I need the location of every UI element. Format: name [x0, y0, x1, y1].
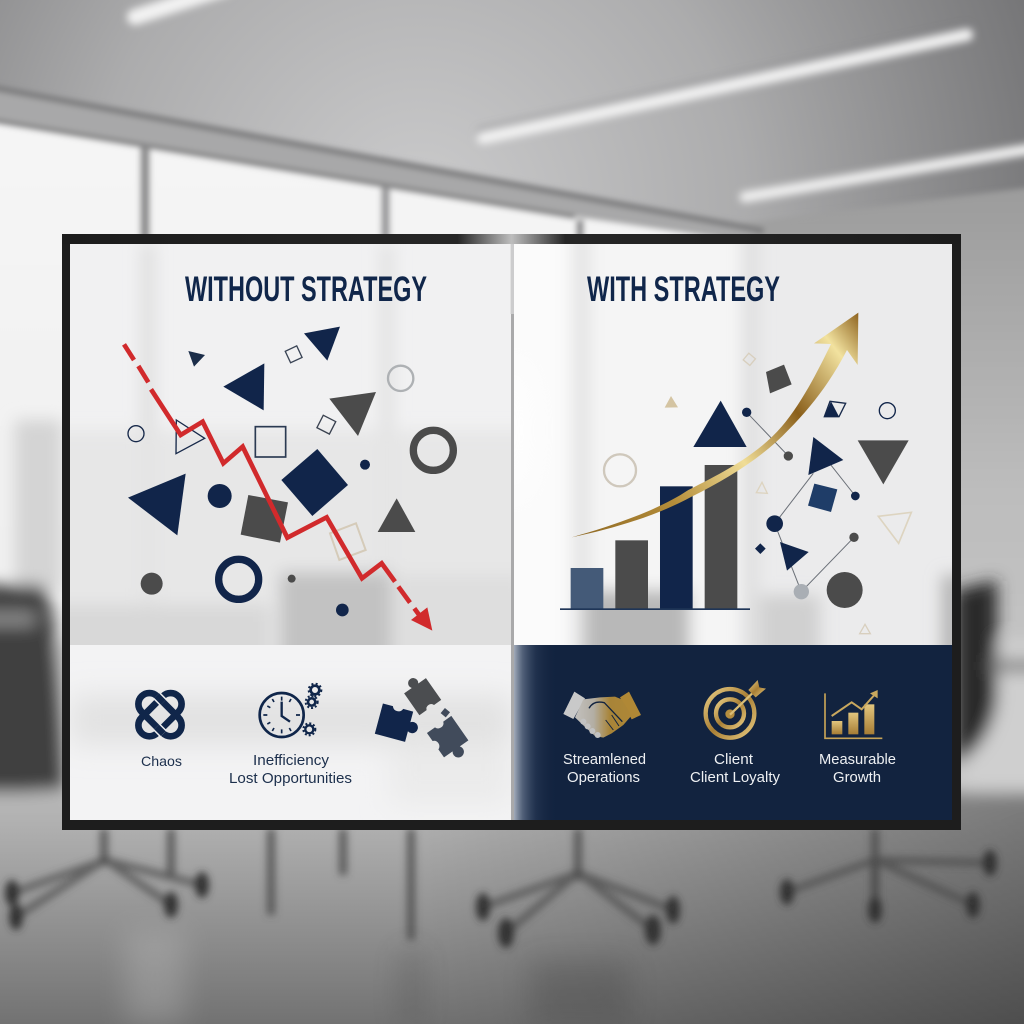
rising gold arrow	[572, 313, 858, 537]
heading: without strategy: WITHOUT STRATEGY	[185, 270, 427, 309]
heading: with strategy: WITH STRATEGY	[587, 270, 780, 309]
label: client loyalty: Client	[714, 752, 753, 768]
label: measurable growth: Measurable	[819, 752, 896, 768]
label: client loyalty: Client Loyalty	[690, 770, 781, 786]
label: streamlined operations: Streamlened	[563, 752, 646, 768]
icon: clock and gears	[260, 684, 321, 737]
chair bases and table legs	[5, 829, 997, 948]
icon: chaos knot	[134, 689, 186, 741]
scattered network shapes	[604, 353, 911, 634]
display frame	[62, 234, 961, 830]
panel divider	[510, 244, 514, 820]
scattered shapes	[128, 327, 453, 616]
falling red arrow	[124, 344, 432, 631]
panel: without strategy outcomes	[70, 645, 512, 820]
panel: without strategy	[70, 244, 511, 645]
label: inefficiency and lost opportunities: Lost Opportunities	[229, 771, 352, 787]
icon: target with arrow	[706, 680, 766, 738]
label: client loyalty	[690, 752, 781, 786]
bar chart	[560, 465, 750, 610]
label: streamlined operations	[563, 752, 646, 786]
panel: with strategy outcomes	[514, 645, 952, 820]
icon: growth chart	[825, 690, 882, 738]
label: measurable growth	[819, 752, 896, 786]
panel: with strategy	[514, 244, 952, 645]
icon: puzzle pieces	[375, 671, 474, 765]
icon: handshake	[563, 692, 641, 738]
label: streamlined operations: Operations	[567, 770, 640, 786]
label: measurable growth: Growth	[833, 770, 881, 786]
label: chaos: Chaos	[141, 753, 182, 769]
label: inefficiency and lost opportunities: Inefficiency	[253, 753, 330, 769]
label: inefficiency and lost opportunities	[229, 753, 352, 787]
